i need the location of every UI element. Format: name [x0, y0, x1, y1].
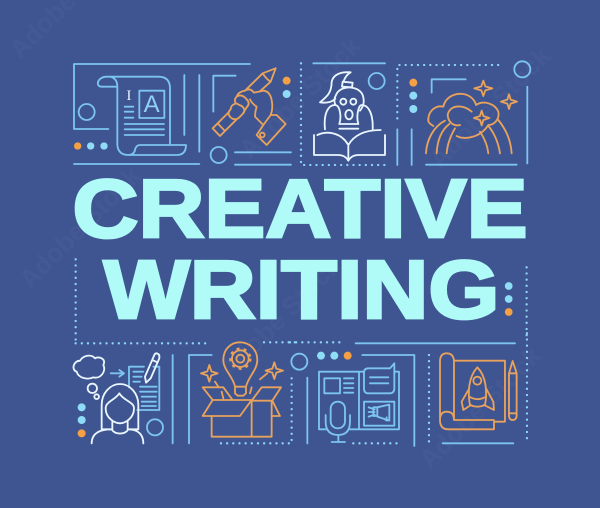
dotted lines — [301, 63, 503, 165]
circles and dots — [369, 61, 530, 113]
icon: thought cloud — [73, 356, 104, 379]
pen — [145, 353, 159, 383]
frame lines — [313, 63, 527, 165]
rocket — [462, 367, 494, 410]
icon: scroll: A — [144, 91, 160, 118]
icon: open box — [203, 373, 281, 437]
icon: hand with pencil — [213, 68, 286, 145]
frame lines — [307, 343, 515, 446]
watermark: Adobe Stock — [413, 340, 547, 474]
thought bubbles — [88, 384, 99, 399]
frame lines — [173, 355, 212, 443]
icon: microphone — [326, 402, 350, 442]
icon: person reading — [314, 72, 385, 161]
title: CREATIVE — [72, 163, 528, 255]
icon: magazine — [319, 372, 399, 429]
frame lines — [74, 64, 291, 165]
circles and dots — [74, 77, 291, 163]
watermark: Adobe Stock — [213, 250, 347, 384]
panel: top right — [301, 61, 530, 165]
dots beside title — [505, 282, 513, 316]
icon: stars — [474, 81, 517, 125]
circle and dots — [78, 403, 163, 437]
icon: light bulb with gear — [223, 342, 257, 396]
speech bubble — [364, 363, 394, 393]
icon: woman — [92, 384, 143, 443]
panel: top left — [74, 64, 291, 165]
watermark: Adobe Stock — [423, 40, 557, 174]
icon: cloud and rainbow — [426, 94, 512, 153]
icon: rocket blueprint — [440, 353, 505, 429]
title — [72, 163, 528, 336]
arrow — [111, 370, 124, 377]
icon: document and pen — [129, 367, 159, 410]
dotted lines — [76, 342, 300, 443]
watermark: Adobe Stock — [13, 160, 147, 294]
circle and dots — [291, 352, 352, 370]
pencil — [509, 361, 517, 420]
icon: scroll — [98, 77, 186, 155]
cuff button — [260, 133, 265, 137]
title: WRITING — [104, 244, 500, 336]
icon: sparkles — [201, 362, 283, 382]
icon: scroll: I — [127, 88, 132, 104]
panel: bottom right — [290, 333, 527, 446]
face details — [340, 99, 356, 119]
watermark: Adobe Stock — [233, 30, 367, 164]
middle dotted lines — [76, 259, 527, 340]
panel: bottom left — [73, 342, 300, 443]
dotted lines — [290, 333, 527, 443]
